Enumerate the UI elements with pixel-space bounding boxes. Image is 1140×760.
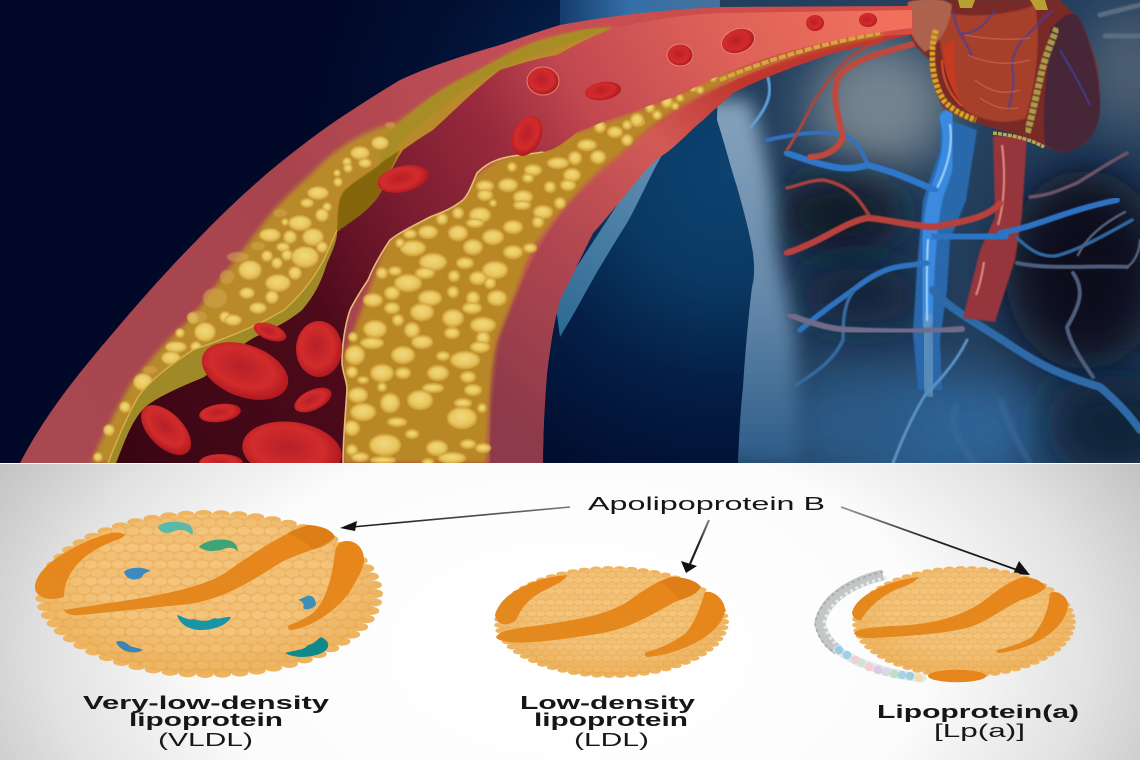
Lp(a) apoB bands [852, 577, 1068, 653]
left plaque fat globules [94, 137, 388, 461]
label: LDL: lipoprotein [534, 710, 688, 730]
arrow to VLDL [340, 507, 570, 531]
label: LDL [520, 693, 695, 750]
faded globules near the wall [143, 122, 395, 374]
left plaque [91, 28, 613, 463]
apolipoprotein(a) bead chain [815, 572, 923, 682]
arrow to LDL [681, 520, 709, 573]
LDL particle [495, 569, 725, 675]
label: VLDL: lipoprotein [129, 710, 283, 730]
apolipoprotein(a) oval [928, 670, 986, 682]
label: Apolipoprotein B: Apolipoprotein B [588, 493, 825, 514]
olive pocket of left plaque [337, 150, 400, 232]
blue veins [750, 78, 1140, 463]
label: Lp(a): [Lp(a)] [934, 721, 1025, 741]
right plaque base [343, 30, 882, 463]
thin gold plaque band near heart [720, 33, 880, 80]
lumen [116, 10, 912, 463]
blue wedge beneath artery [555, 150, 665, 337]
panel: lipoprotein diagram [0, 464, 1140, 760]
Lp(a) particle [815, 569, 1070, 682]
gray-purple branches [790, 5, 1140, 377]
arrow to Lp(a) [841, 507, 1030, 575]
label: LDL: Low-density [520, 693, 695, 713]
background sky-blue strip above artery [560, 0, 720, 25]
heart [907, 0, 1100, 152]
label: Lp(a) [877, 702, 1079, 741]
olive lining along lumen [108, 230, 337, 463]
label: Lp(a): Lipoprotein(a) [877, 702, 1079, 722]
label: VLDL [83, 693, 329, 750]
lumen edge lines [108, 230, 337, 463]
right plaque fat globules [345, 75, 716, 465]
red arteries [787, 42, 1000, 253]
panel: artery and heart illustration [0, 0, 1140, 487]
artery wall [20, 6, 913, 463]
blue right branch over aorta [935, 200, 1132, 256]
olive band along upper lumen [380, 28, 613, 168]
LDL apoB bands [495, 575, 725, 657]
label: VLDL: Very-low-density [83, 693, 329, 713]
aorta [963, 136, 1027, 322]
VLDL apoB bands [35, 525, 364, 630]
label: VLDL: (VLDL) [158, 730, 253, 750]
VLDL particle [35, 514, 374, 674]
label: LDL: (LDL) [574, 730, 649, 750]
VLDL surface proteins [116, 522, 328, 657]
red blood cells [132, 13, 877, 487]
torso silhouette [717, 0, 1140, 463]
